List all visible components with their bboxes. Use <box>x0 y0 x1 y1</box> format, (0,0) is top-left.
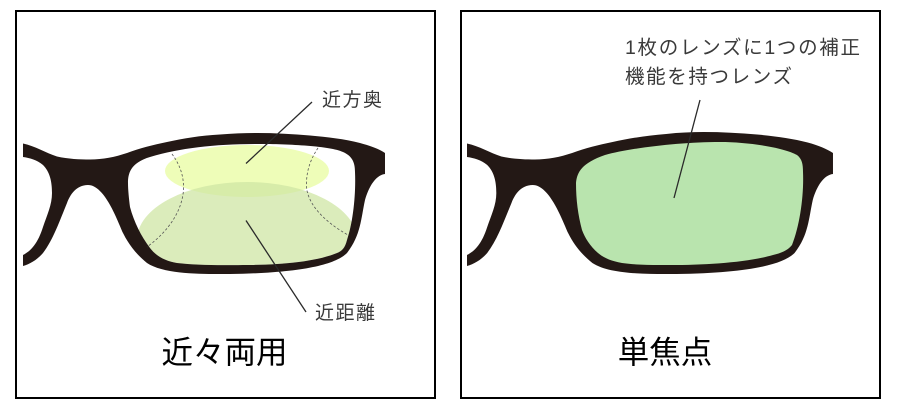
text: lens description: 機能を持つレンズ <box>625 66 792 88</box>
label: 近方奥: 近方奥 <box>322 89 384 111</box>
leader line: 近方奥 <box>246 102 312 164</box>
text: lens description <box>625 37 860 88</box>
text: lens description: 1枚のレンズに1つの補正 <box>625 37 860 59</box>
lens zones <box>138 145 352 265</box>
heading: 単焦点: 単焦点 <box>618 334 712 370</box>
glasses frame <box>467 132 833 274</box>
lens <box>576 142 803 265</box>
dashed corridor lines <box>147 148 348 247</box>
leader line: lens description <box>674 100 700 198</box>
panel: single-focus lens <box>461 11 880 398</box>
icon: bifocal glasses <box>23 133 385 274</box>
label: 近距離: 近距離 <box>315 302 377 324</box>
panel: bifocal near-near lens <box>16 11 435 398</box>
leader line: 近距離 <box>246 220 306 312</box>
icon: single-focus glasses <box>467 132 833 274</box>
heading: 近々両用: 近々両用 <box>161 334 288 370</box>
glasses frame <box>23 133 385 274</box>
